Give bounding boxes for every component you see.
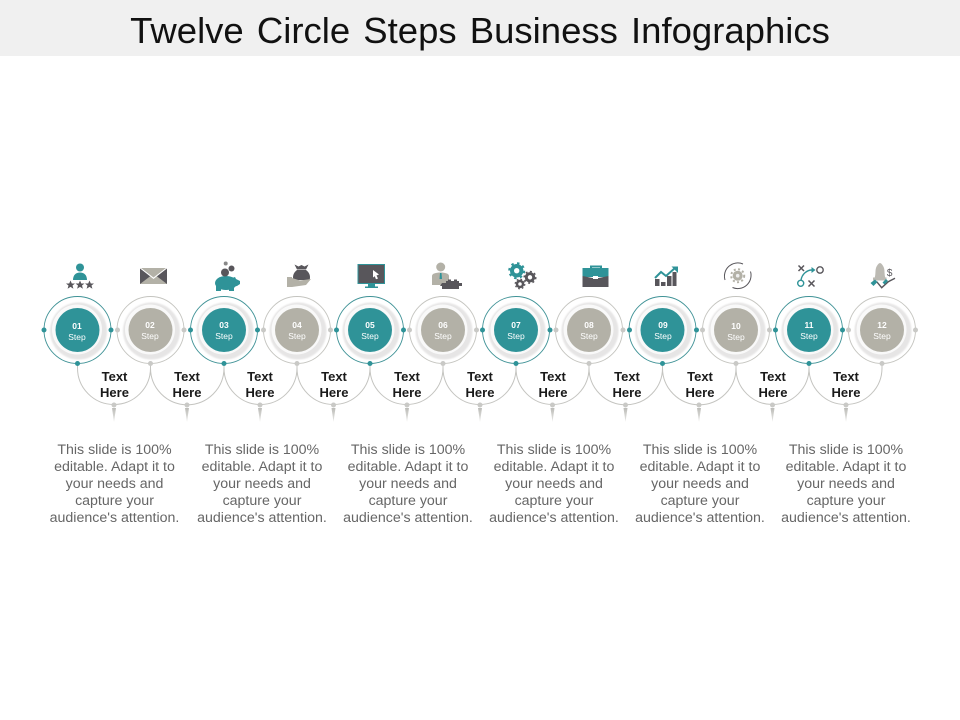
step circle 06: Step xyxy=(434,331,452,341)
step circle 03: Step xyxy=(215,331,233,341)
step circle 10 xyxy=(700,296,772,366)
step circle 12 xyxy=(846,296,918,366)
icon: strategy play xyxy=(798,266,823,286)
connector arcs and pins xyxy=(78,363,882,422)
label: text here 11: Here xyxy=(832,385,860,400)
step circle 09 xyxy=(627,296,699,366)
step circle 08 xyxy=(554,296,626,366)
icon: envelope xyxy=(140,268,168,284)
icon: person with stars xyxy=(66,264,94,289)
step circle 01: Step xyxy=(68,332,86,342)
icon: money bag in hand xyxy=(287,264,311,287)
step circle 04: 04 xyxy=(292,320,302,330)
label: text here 1: Text xyxy=(102,369,128,384)
text block 1: audience's attention. xyxy=(50,510,179,526)
label: text here 4: Text xyxy=(321,369,348,384)
step circle 02: Step xyxy=(141,331,159,341)
text block 4: audience's attention. xyxy=(489,510,619,526)
text block 1: capture your xyxy=(75,493,154,509)
text block 3: audience's attention. xyxy=(343,510,473,526)
label: text here 11: Text xyxy=(833,369,860,384)
icon: bell with dollar and arrow: $ xyxy=(887,268,893,279)
step circle 01 xyxy=(42,296,114,366)
step circle 02: 02 xyxy=(145,320,155,330)
text block 5: audience's attention. xyxy=(635,510,765,526)
label: text here 5: Here xyxy=(393,385,421,400)
label: text here 2: Text xyxy=(174,369,201,384)
step circle 01: 01 xyxy=(72,321,82,331)
text block 3: editable. Adapt it to xyxy=(348,459,468,475)
step circle 02 xyxy=(115,296,186,366)
label: text here 7: Here xyxy=(539,385,567,400)
label: text here 9: Text xyxy=(687,369,714,384)
step circle 09: 09 xyxy=(658,320,668,330)
label: text here 8: Here xyxy=(613,385,641,400)
text block 5: This slide is 100% xyxy=(643,442,758,458)
text block 4: editable. Adapt it to xyxy=(494,459,614,475)
step circle 12: 12 xyxy=(877,320,887,330)
text block 2: audience's attention. xyxy=(197,510,327,526)
step circle 07: Step xyxy=(507,331,525,341)
icon: monitor with cursor xyxy=(358,264,384,288)
label: text here 6: Here xyxy=(466,385,494,400)
label: text here 2: Here xyxy=(173,385,201,400)
label: text here 6: Text xyxy=(467,369,494,384)
title band xyxy=(0,0,960,56)
step circle 05: Step xyxy=(361,331,379,341)
step circle 11 xyxy=(773,296,845,366)
step circle 08: Step xyxy=(580,331,598,341)
text block 4: capture your xyxy=(515,493,594,509)
text block 4: your needs and xyxy=(505,476,603,492)
text block 5: your needs and xyxy=(651,476,749,492)
step circle 09: Step xyxy=(654,331,672,341)
text block 5: capture your xyxy=(661,493,740,509)
text block 6: editable. Adapt it to xyxy=(786,459,906,475)
step circle 11: 11 xyxy=(804,320,814,330)
label: text here 10: Text xyxy=(760,369,787,384)
label: text here 5: Text xyxy=(394,369,421,384)
text block 2: your needs and xyxy=(213,476,311,492)
label: text here 8: Text xyxy=(614,369,641,384)
text block 2: editable. Adapt it to xyxy=(202,459,322,475)
step circle 07 xyxy=(480,296,552,366)
step circle 08: 08 xyxy=(584,320,594,330)
step circle 06 xyxy=(407,296,479,366)
step circle 12: Step xyxy=(873,331,891,341)
text block 2: capture your xyxy=(223,493,302,509)
icon: growth chart xyxy=(655,266,678,286)
label: text here 7: Text xyxy=(540,369,567,384)
icon: bell with dollar and arrow xyxy=(870,263,895,288)
text block 6: your needs and xyxy=(797,476,895,492)
icon: piggy bank xyxy=(215,262,240,291)
text block 6: audience's attention. xyxy=(781,510,911,526)
label: text here 4: Here xyxy=(320,385,348,400)
text block 2: This slide is 100% xyxy=(205,442,320,458)
step circle 05: 05 xyxy=(365,320,375,330)
text block 3: This slide is 100% xyxy=(351,442,466,458)
text block 1: your needs and xyxy=(66,476,163,492)
title: Twelve Circle Steps Business Infographics xyxy=(130,10,830,51)
icon: businessman with puzzle xyxy=(432,262,462,289)
step circle 04: Step xyxy=(288,331,306,341)
text block 1: This slide is 100% xyxy=(57,442,172,458)
step circle 10: Step xyxy=(727,332,745,342)
text block 1: editable. Adapt it to xyxy=(54,459,175,475)
step circle 03: 03 xyxy=(219,320,229,330)
step circle 10: 10 xyxy=(731,321,741,331)
label: text here 10: Here xyxy=(759,385,787,400)
label: text here 3: Here xyxy=(246,385,274,400)
text block 3: capture your xyxy=(369,493,448,509)
step circle 07: 07 xyxy=(511,320,521,330)
step circle 11: Step xyxy=(800,331,818,341)
step circle 06: 06 xyxy=(438,320,448,330)
text block 3: your needs and xyxy=(359,476,457,492)
icon: gear refresh xyxy=(724,263,751,289)
label: text here 9: Here xyxy=(686,385,714,400)
label: text here 1: Here xyxy=(100,385,129,400)
label: text here 3: Text xyxy=(247,369,274,384)
text block 5: editable. Adapt it to xyxy=(640,459,760,475)
text block 4: This slide is 100% xyxy=(497,442,612,458)
step circle 03 xyxy=(188,296,260,366)
text block 6: capture your xyxy=(807,493,886,509)
step circle 04 xyxy=(261,296,333,366)
icon: briefcase xyxy=(582,266,608,287)
text block 6: This slide is 100% xyxy=(789,442,904,458)
step circle 05 xyxy=(334,296,406,366)
icon: gears xyxy=(509,263,536,289)
